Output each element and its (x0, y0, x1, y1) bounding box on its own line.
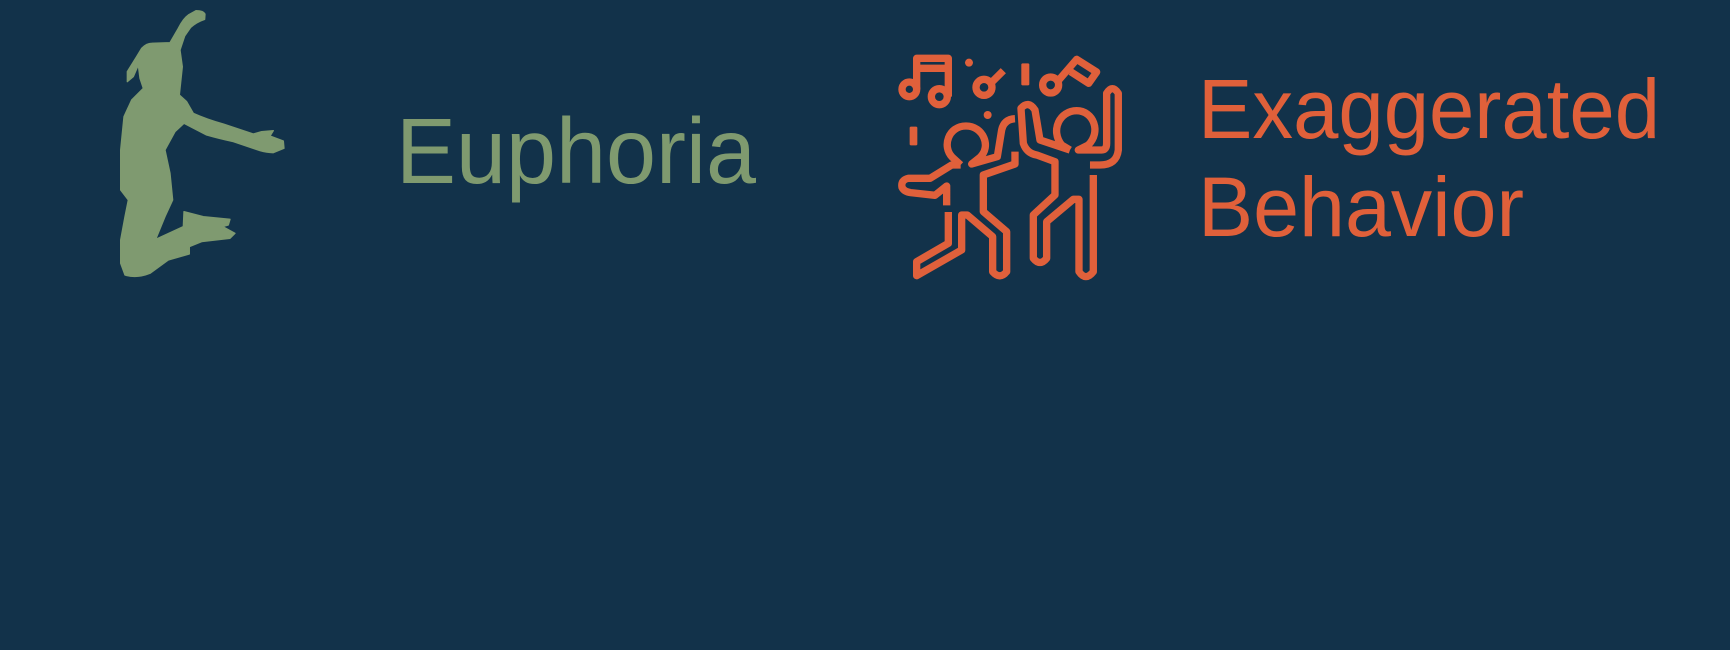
icon: jumping figure silhouette (121, 11, 284, 276)
label: Exaggerated Behavior (1198, 62, 1660, 254)
icon: two people dancing with music notes (902, 58, 1118, 277)
label line: Behavior: Behavior (1198, 160, 1524, 254)
icon part: double note heads (902, 82, 947, 105)
icon part: flagged note (1043, 59, 1097, 93)
icon part: double music note (917, 58, 948, 97)
icon part: right dancer (1021, 89, 1118, 277)
icon part: single note (976, 71, 1003, 95)
label line: Exaggerated: Exaggerated (1198, 62, 1660, 156)
icon part: small dots and dashes (910, 59, 1029, 145)
icon part: left dancer (902, 119, 1015, 276)
label: Euphoria: Euphoria (396, 99, 756, 203)
